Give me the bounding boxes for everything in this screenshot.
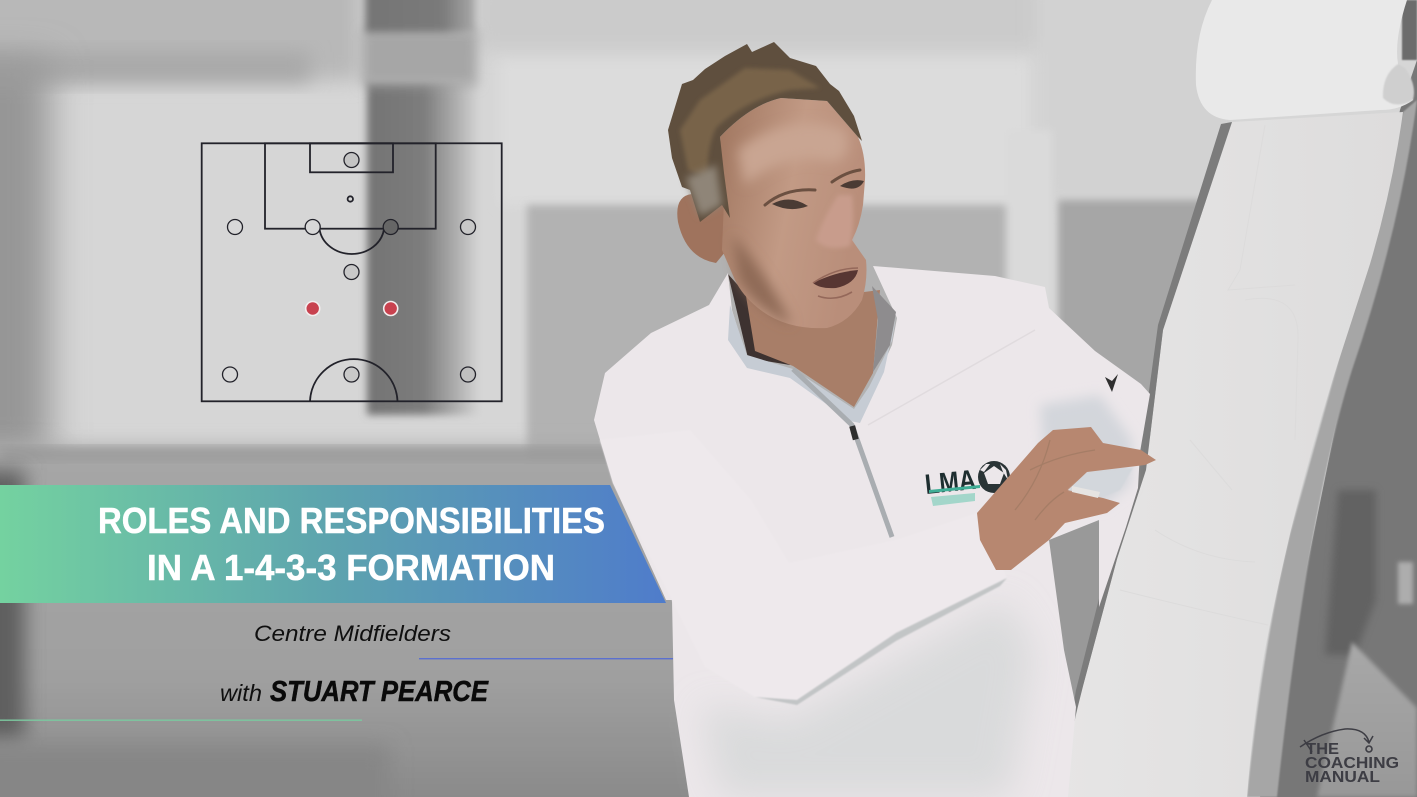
flipchart: top right opening: [1402, 0, 1417, 60]
pitch: penalty arc: [320, 229, 384, 254]
person: hand: [977, 427, 1156, 570]
logo: word the: THE: [1306, 741, 1339, 758]
logo: ball: [1366, 746, 1372, 752]
flipchart: paper sheet: [1060, 112, 1403, 797]
logo small text: [931, 493, 975, 506]
person: hair highlight: [680, 68, 820, 178]
person: chest logo: [923, 461, 1010, 506]
flipchart: left sheet edge: [1064, 122, 1232, 760]
flipchart: right bracket: [1398, 562, 1413, 604]
player: right winger: [460, 367, 476, 382]
player: goalkeeper: [344, 152, 359, 168]
title banner: [0, 485, 666, 603]
player: highlighted centre midfielder right: [384, 302, 398, 316]
player: holding midfielder: [344, 264, 359, 280]
player: left back: [228, 220, 242, 234]
person: knuckle detail: [1015, 440, 1095, 520]
person: mouth: [813, 270, 858, 288]
logo underline: [929, 485, 980, 493]
players: formation markers: [222, 152, 476, 382]
player: centre back left: [305, 220, 320, 234]
player: right back: [460, 220, 476, 234]
person: nose: [816, 195, 853, 248]
person: underarm shadow: [1040, 395, 1132, 508]
person: inner collar light: [728, 305, 896, 423]
presenter name: [220, 676, 489, 708]
person: ear: [677, 194, 735, 263]
person: pale gap between fingers: [1068, 468, 1133, 497]
player: left winger: [222, 367, 238, 382]
flipchart: floor behind leg: [1317, 642, 1417, 797]
person: sleeve underside shadow: [755, 578, 1007, 705]
logo: word coaching: COACHING: [1305, 755, 1399, 772]
flipchart: roll curl shade: [1383, 64, 1414, 105]
logo letters: LMA: [923, 464, 977, 500]
banner: gradient band: [0, 485, 666, 603]
pitch: centre circle arc: [310, 359, 398, 401]
player: highlighted centre midfielder left: [306, 302, 320, 316]
flipchart: paper roll: [1196, 0, 1413, 120]
person: cheek shadow: [732, 235, 792, 325]
pitch diagram: [202, 143, 502, 401]
subtitle: position: Centre Midfielders: [254, 621, 451, 646]
person: coach at flipchart: [594, 42, 1156, 797]
person: sleeve: [600, 430, 1007, 700]
person: face: [720, 98, 866, 328]
pitch: outline: [202, 143, 502, 401]
person: zipper pull: [849, 425, 859, 440]
flipchart: lower dark block: [1325, 490, 1376, 655]
flipchart: board and paper: [1060, 0, 1417, 797]
person: inner collar dark: [728, 274, 790, 365]
banner: title line 2: IN A 1-4-3-3 FORMATION: [147, 547, 555, 588]
person: right collar shadow: [872, 286, 896, 372]
person: hair: [668, 42, 862, 222]
person: torso shading: [700, 600, 1035, 797]
person: grey temple: [686, 165, 722, 216]
person: brand tick: [1105, 374, 1118, 392]
person: sweatshirt body: [594, 266, 1150, 797]
logo: word manual: MANUAL: [1305, 769, 1380, 786]
logo: curved arrow: [1300, 729, 1373, 752]
person: ring: [1072, 486, 1100, 498]
flipchart: grey board edge: [1247, 100, 1417, 797]
pitch: six yard box: [310, 143, 393, 172]
pitch: penalty spot: [348, 196, 353, 202]
banner: title line 1: ROLES AND RESPONSIBILITIES: [98, 500, 605, 541]
player: striker: [344, 367, 359, 382]
person: zipper: [793, 369, 892, 537]
person: forehead highlight: [738, 123, 848, 185]
person: eyes and brows: [765, 170, 860, 205]
divider: blue line: [419, 658, 673, 659]
pitch: penalty box: [265, 143, 436, 229]
player: centre back right: [383, 220, 398, 234]
presenter: with: with: [220, 680, 262, 706]
logo: The Coaching Manual: [1300, 729, 1399, 786]
person: chest seam: [868, 330, 1035, 425]
flipchart: faint marker marks: [1120, 125, 1298, 625]
flipchart: dark board: [1260, 60, 1417, 797]
divider: green line: [0, 720, 362, 721]
logo football: [978, 461, 1010, 493]
presenter: name: STUART PEARCE: [270, 676, 489, 708]
person: neck: [745, 290, 880, 407]
